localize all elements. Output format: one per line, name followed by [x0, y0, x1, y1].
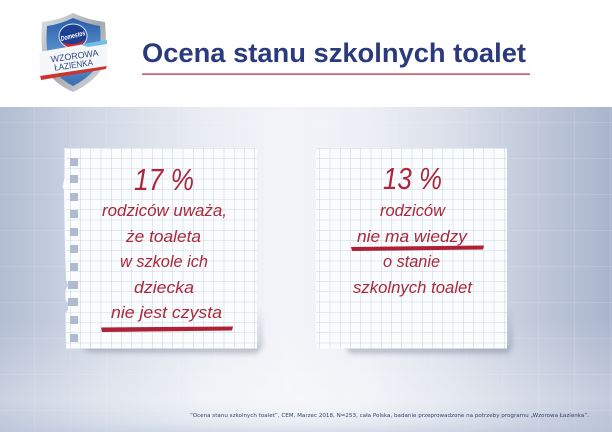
panel: note 17%: [62, 148, 262, 353]
text: note 1 lines: rodziców uważa,: [102, 201, 227, 220]
text: note 1 lines: w szkole ich: [120, 252, 208, 271]
binder holes: [68, 158, 78, 342]
text: note 1 lines: nie jest czysta: [111, 303, 222, 322]
title: Ocena stanu szkolnych toalet: [142, 38, 526, 68]
underline stroke: [351, 246, 484, 251]
logo: ribbon: [39, 40, 107, 80]
text: note 1 lines: [102, 201, 227, 322]
logo: ribbon: ŁAZIENKA: [54, 57, 94, 73]
text: note 2 lines: o stanie: [383, 252, 440, 271]
panel: note 13%: [316, 148, 512, 353]
text: note 2 lines: rodziców: [380, 201, 447, 220]
text: note 2 lines: nie ma wiedzy: [357, 227, 469, 246]
statistic: 13 %: 13 %: [383, 161, 442, 196]
text: note 1 lines: dziecka: [134, 278, 194, 297]
text: note 2 lines: szkolnych toalet: [353, 278, 473, 297]
text: note 1 lines: że toaleta: [125, 227, 201, 246]
title underline: [142, 74, 530, 75]
source footnote: “Ocena stanu szkolnych toalet”, CEM, Marzec 2018, N=253, cała Polska, badanie przeprowadzone na potrzeby programu „Wzorowa Łazienka”.: [190, 413, 589, 419]
logo: Wzorowa Łazienka shield: [39, 13, 107, 92]
text: note 2 lines: [353, 201, 473, 297]
statistic: 17 %: 17 %: [134, 162, 194, 197]
background: tiled wall: [0, 107, 612, 432]
underline stroke: [101, 326, 233, 332]
logo: Domestos roundel: Domestos: [60, 30, 86, 43]
logo: ribbon: WZOROWA: [50, 48, 99, 64]
